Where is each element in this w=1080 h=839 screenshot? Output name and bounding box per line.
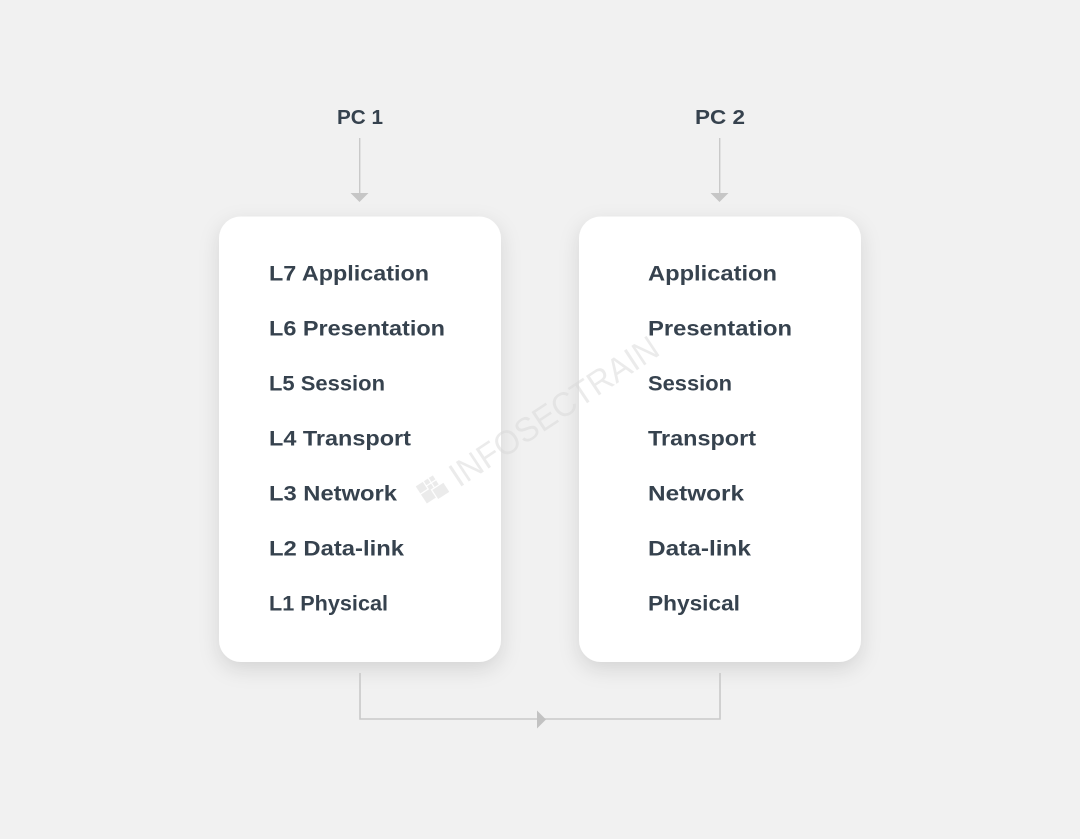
layer label: L4: L4 Transport bbox=[269, 428, 411, 450]
arrow: PC 2 down bbox=[710, 138, 728, 202]
layer label: Transport: Transport bbox=[648, 428, 756, 450]
layer label: L7: L7 Application bbox=[269, 262, 429, 286]
arrow: connector from PC 1 to PC 2 bbox=[360, 673, 720, 728]
layer label: L3: L3 Network bbox=[269, 482, 397, 506]
heading: PC 1: PC 1 bbox=[337, 107, 383, 129]
layer label: Data-link: Data-link bbox=[648, 538, 751, 560]
layer label: Network: Network bbox=[648, 482, 744, 506]
layer label: L2: L2 Data-link bbox=[269, 538, 404, 560]
panel: PC 1 layers bbox=[219, 216, 501, 662]
layer label: Session: Session bbox=[648, 372, 732, 396]
arrow: PC 1 down bbox=[350, 138, 368, 202]
layer label: L5: L5 Session bbox=[269, 372, 385, 396]
watermark logo bbox=[416, 473, 449, 506]
watermark: INFOSECTRAIN bbox=[416, 329, 666, 506]
layer label: L6: L6 Presentation bbox=[269, 318, 445, 340]
layer label: Physical: Physical bbox=[648, 592, 740, 616]
panel: PC 2 layers bbox=[579, 216, 861, 662]
layer label: Presentation: Presentation bbox=[648, 318, 792, 340]
watermark text: INFOSECTRAIN bbox=[442, 329, 666, 495]
layer label: L1: L1 Physical bbox=[269, 592, 388, 616]
heading: PC 2: PC 2 bbox=[695, 107, 745, 129]
layer label: Application: Application bbox=[648, 262, 777, 286]
